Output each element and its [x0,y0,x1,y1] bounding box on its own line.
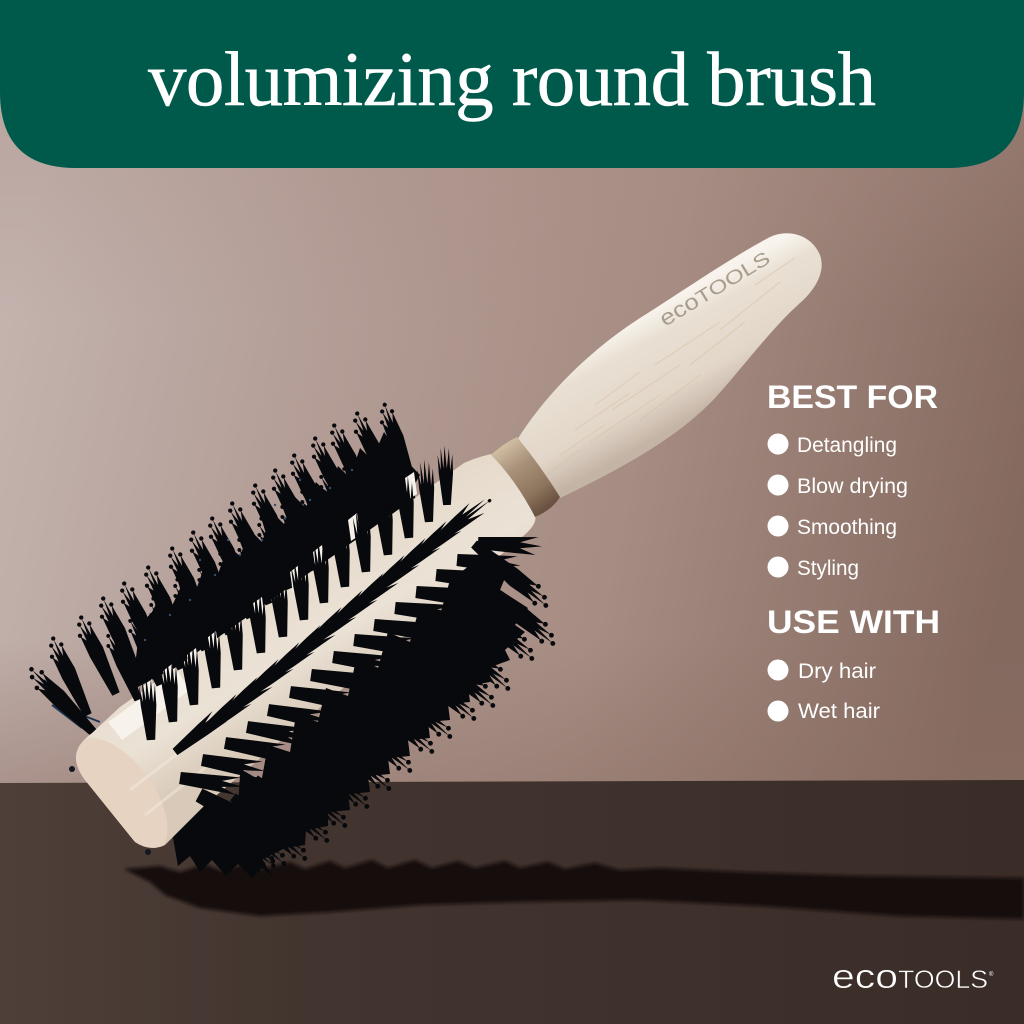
blue sparkle highlights [144,469,353,641]
middle upper bristle row [100,426,419,703]
barrel end cap [76,672,208,848]
bullet: dry hair [768,660,876,683]
heading: best for: BEST FOR [767,379,938,415]
brand logo: eco [832,958,898,996]
barrel [76,453,535,848]
bullet: dry hair: Dry hair [798,660,876,683]
handle logo [655,245,774,331]
front upper bristle row [138,445,454,741]
bullet: smoothing: Smoothing [797,516,897,539]
rear upper bristle row [22,400,420,741]
brush cast shadow [124,860,1024,919]
bullet: wet hair: Wet hair [798,700,880,723]
handle [517,233,822,499]
header banner [0,0,1024,168]
floor surface [0,780,1024,1024]
metal ferrule [491,437,560,517]
stray bristle tips near end cap [69,766,151,855]
title: volumizing round brush [148,36,876,122]
bullet: wet hair [768,700,880,723]
round brush [22,233,822,878]
info panel: best for and use with [767,379,940,723]
dense lower bristle mass [220,558,528,860]
heading: use with: USE WITH [767,604,940,640]
front lower bristle row [179,534,542,844]
rear lower bristle row [206,535,563,871]
handle wood grain [540,258,795,480]
brand logo: ® [989,971,994,978]
bullet: styling: Styling [797,557,859,580]
bristles beneath barrel [172,804,282,878]
barrel glints between bristles [143,472,417,707]
brand logo [832,958,994,996]
background wall [0,0,1024,800]
bullet: detangling: Detangling [797,434,897,457]
brand logo: TOOLS [898,966,988,994]
handle logo: eco [655,288,703,331]
bullet: blow drying: Blow drying [797,475,908,498]
bullet: styling [768,556,859,580]
central thin bristle row [169,491,495,758]
handle logo: TOOLS [692,248,774,309]
